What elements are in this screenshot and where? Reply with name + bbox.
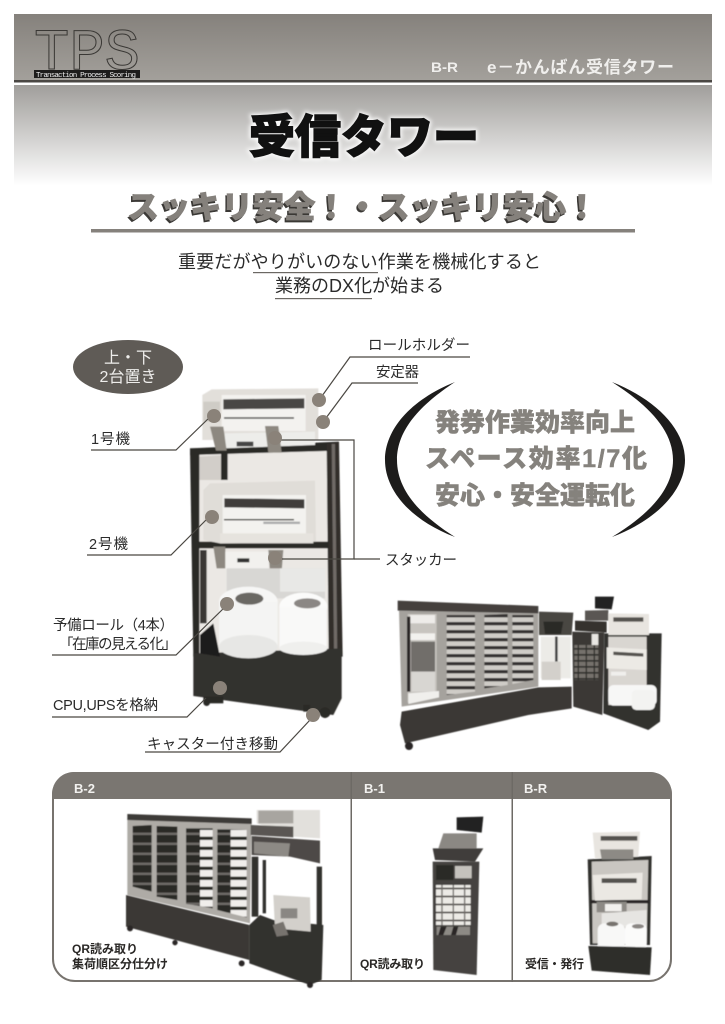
model names [74,781,548,796]
subtitle: スッキリ安全！・スッキリ安心！ [128,190,598,225]
callout labels: 1号機 [91,431,130,448]
intro text: 業務のDX化が始まる [275,276,444,296]
callout labels: CPU,UPSを格納 [53,697,158,714]
photo: B-1 [433,817,483,975]
title: 受信タワー [249,111,479,163]
callout: benefits: 安心・安全運転化 [435,482,635,510]
intro text: 重要だがやりがいのない作業を機械化すると [178,252,541,272]
logo: TPS: Transaction Process Scoring [36,72,136,80]
badge: 2 units stacked: 上・下 [104,349,152,367]
callout labels: キャスター付き移動 [147,736,278,753]
photo: B-2 [126,810,323,988]
callout labels: スタッカー [385,552,457,569]
model captions [72,941,584,971]
logo: TPS: TPS [34,22,140,87]
model captions: 受信・発行 [525,956,584,971]
header product label: B-R [431,59,458,75]
photo: full system [398,597,662,750]
callout: benefits: スペース効率1/7化 [425,445,647,473]
printer 1 [202,388,318,440]
panel: model lineup [52,772,672,988]
model captions: 集荷順区分仕分け [72,956,168,971]
model names: B-2 [74,781,95,796]
model captions: QR読み取り [72,941,138,956]
callout labels: 安定器 [376,364,420,381]
model captions: QR読み取り [360,956,425,971]
model names: B-1 [364,781,385,796]
subtitle rule [91,229,635,232]
photo: receiving tower [190,388,343,718]
casters [203,697,223,703]
callout labels: 「在庫の見える化」 [59,636,177,653]
printer 2 [203,481,316,543]
title: 受信タワー [249,111,479,163]
badge: 2 units stacked: 2台置き [100,368,156,386]
callout: benefits: 発券作業効率向上 [435,409,635,437]
callout labels: 予備ロール（4本） [53,617,174,634]
callout lines [52,357,470,752]
model names: B-R [524,781,548,796]
header product label: e－かんばん受信タワー [487,58,674,77]
intro text [178,252,541,299]
callout labels: ロールホルダー [368,337,470,354]
header band [14,14,712,87]
subtitle: スッキリ安全！・スッキリ安心！ [126,192,596,227]
callout dots [205,393,330,722]
callout labels: 2号機 [89,536,128,553]
callout labels [53,337,470,753]
title band [14,85,712,186]
rolls [227,568,325,598]
photo: B-R [588,832,652,975]
callout: benefits [385,382,685,537]
badge: 2 units stacked [73,340,183,394]
